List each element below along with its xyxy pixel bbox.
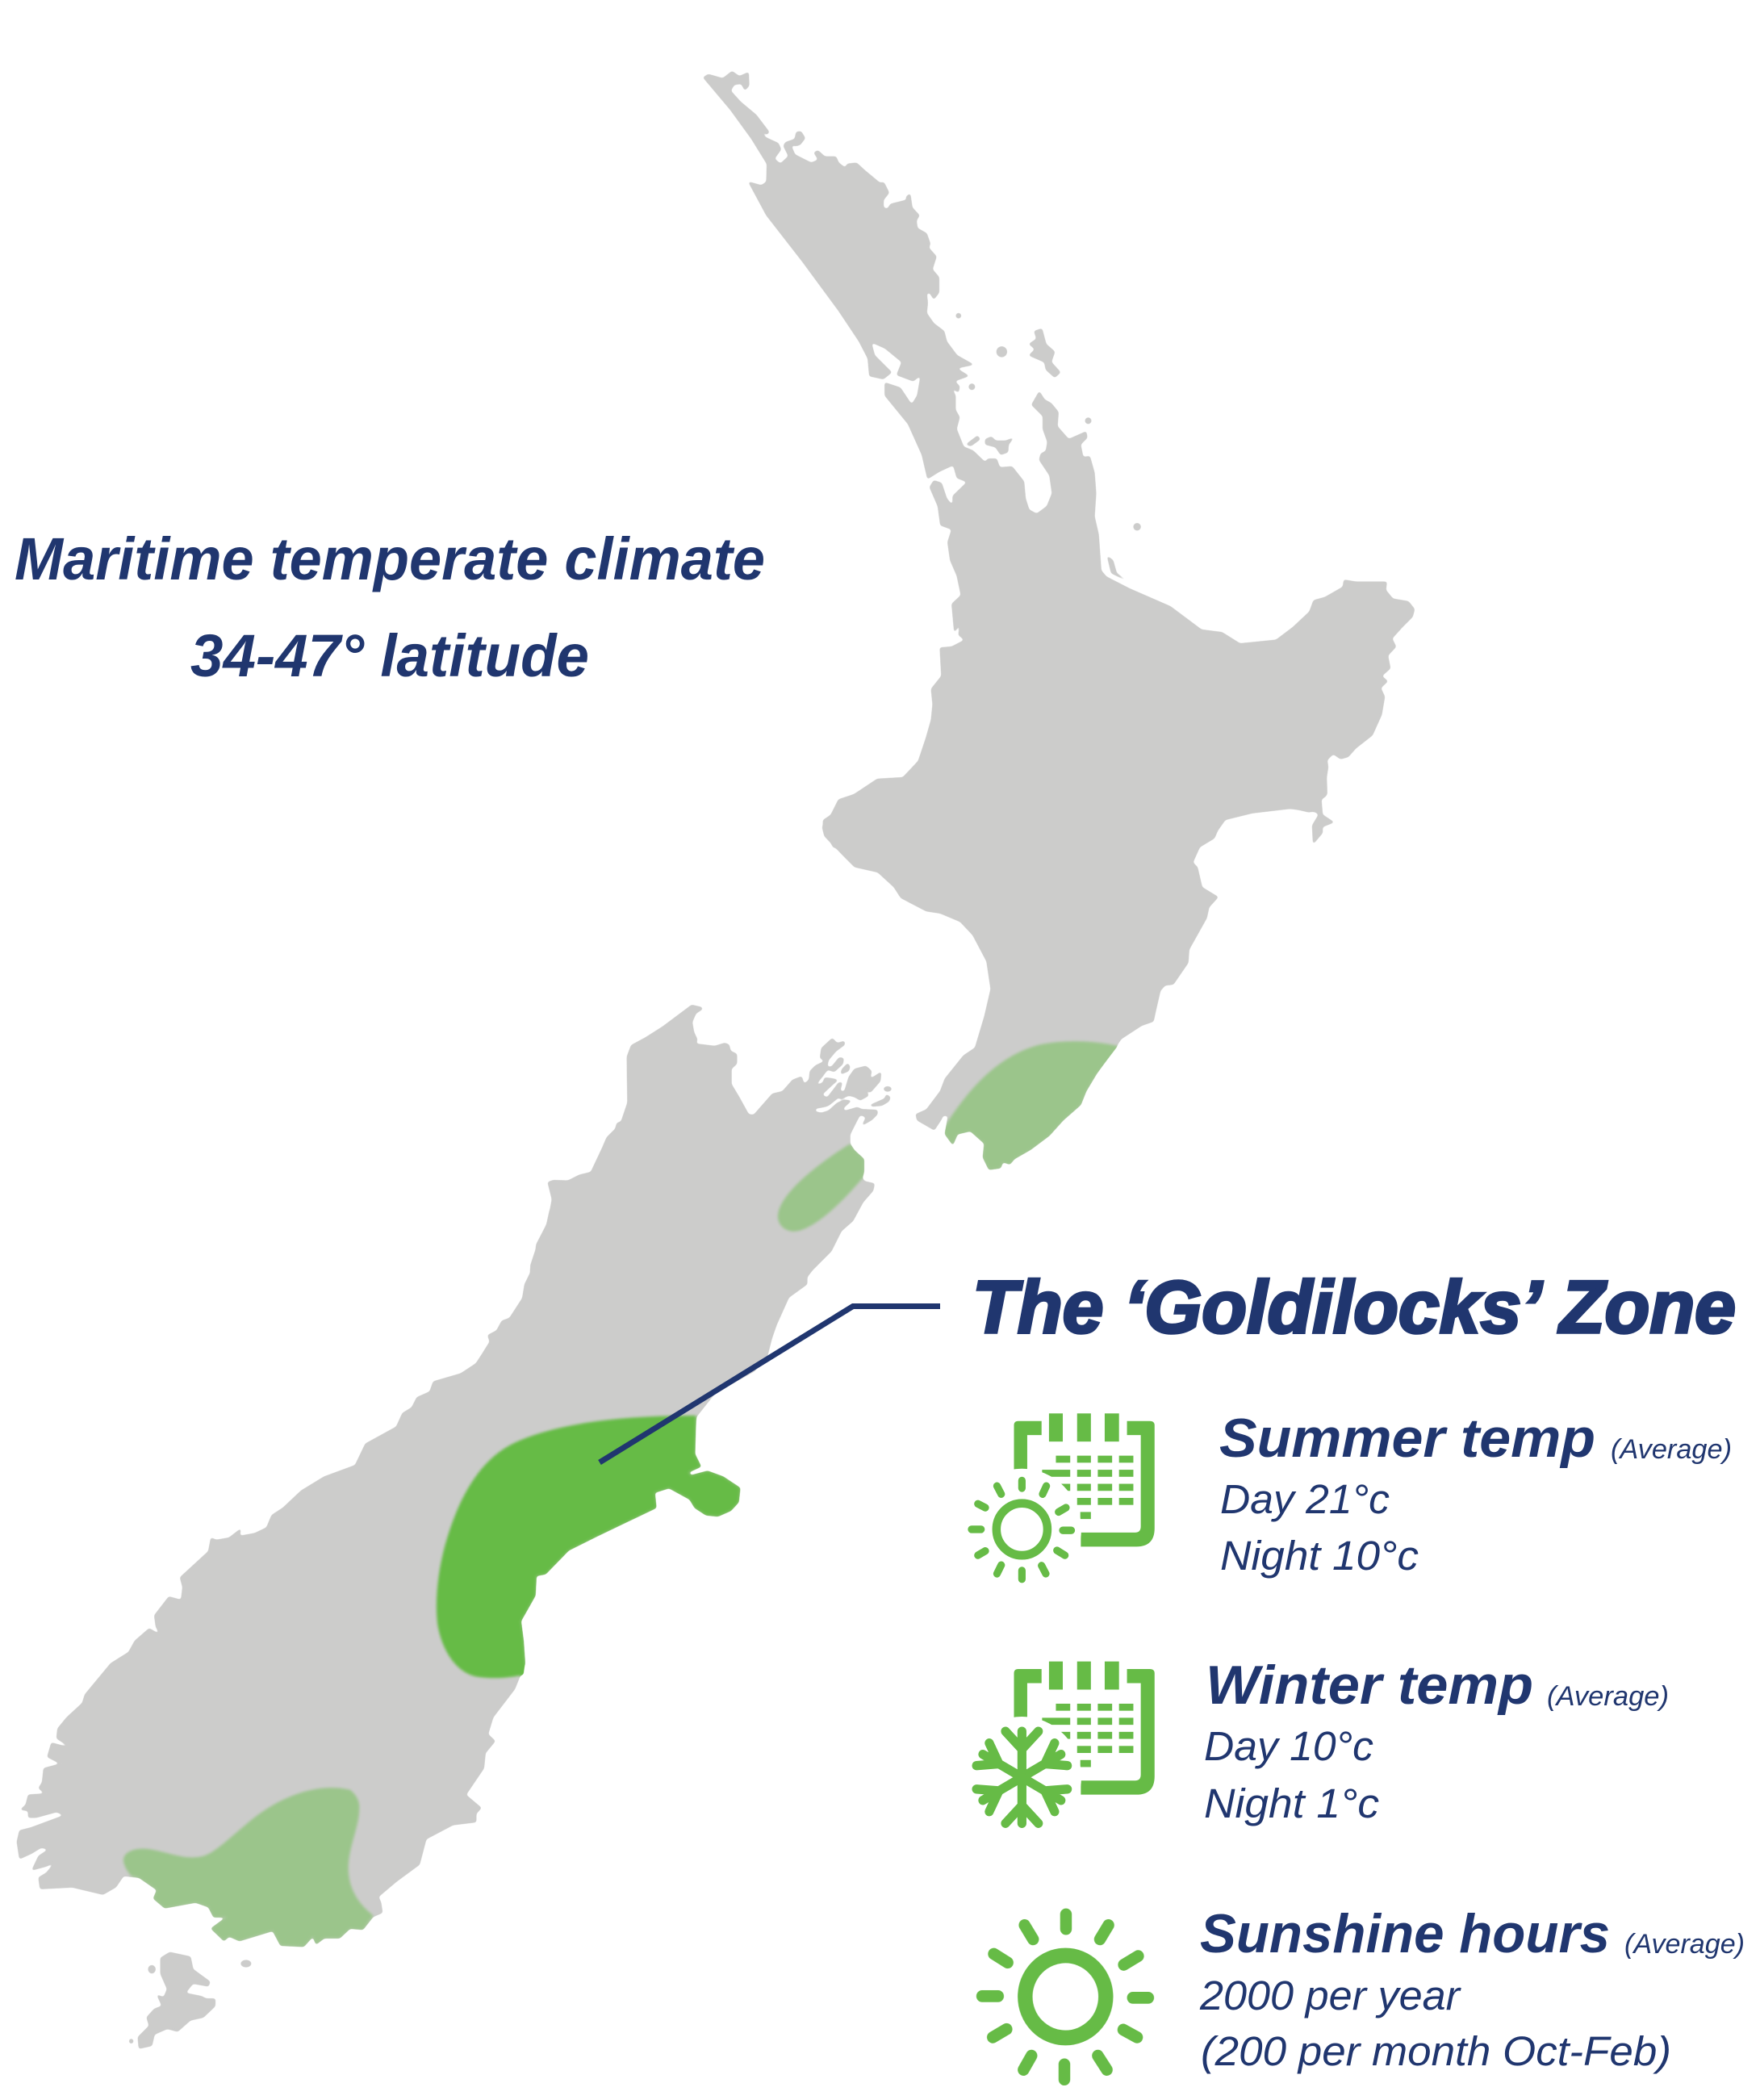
text: winter temp — [1204, 1654, 1669, 1826]
text: summer temp: Day 21°c — [1220, 1476, 1390, 1522]
text: sunshine hours: (200 per month Oct-Feb) — [1201, 2028, 1671, 2074]
text: sunshine hours: (Average) — [1624, 1929, 1745, 1960]
Stewart Island — [129, 1952, 251, 2048]
icon: summer calendar with sun — [963, 1413, 1155, 1590]
text: winter temp: Winter temp — [1206, 1654, 1533, 1716]
region: Wairarapa — [945, 1041, 1118, 1169]
region: Marlborough — [778, 1144, 864, 1232]
South Island — [17, 1005, 892, 1947]
text: winter temp: Day 10°c — [1204, 1723, 1373, 1769]
text: summer temp: Night 10°c — [1220, 1533, 1419, 1579]
North Island — [703, 71, 1415, 1169]
text: winter temp: Night 1°c — [1204, 1780, 1379, 1826]
text: sunshine hours — [1199, 1903, 1745, 2074]
text: winter temp: (Average) — [1547, 1681, 1669, 1712]
text: summer temp: (Average) — [1611, 1434, 1732, 1465]
text: summer temp — [1219, 1408, 1732, 1579]
icon: sun — [982, 1914, 1148, 2080]
region: Goldilocks zone — [437, 1416, 740, 1678]
leader line — [600, 1306, 940, 1462]
heading: Goldilocks zone: The ‘Goldilocks’ Zone — [972, 1266, 1736, 1349]
text: summer temp: Summer temp — [1219, 1408, 1595, 1469]
region: Central Otago and Southland — [123, 1788, 373, 1947]
text: sunshine hours: Sunshine hours — [1200, 1903, 1610, 1964]
text: climate: Maritime temperate climate — [15, 525, 765, 592]
map: New Zealand — [17, 71, 1415, 2048]
text: sunshine hours: 2000 per year — [1199, 1972, 1461, 2018]
text: latitude: 34-47° latitude — [190, 622, 589, 689]
icon: winter calendar with snowflake — [963, 1662, 1155, 1838]
